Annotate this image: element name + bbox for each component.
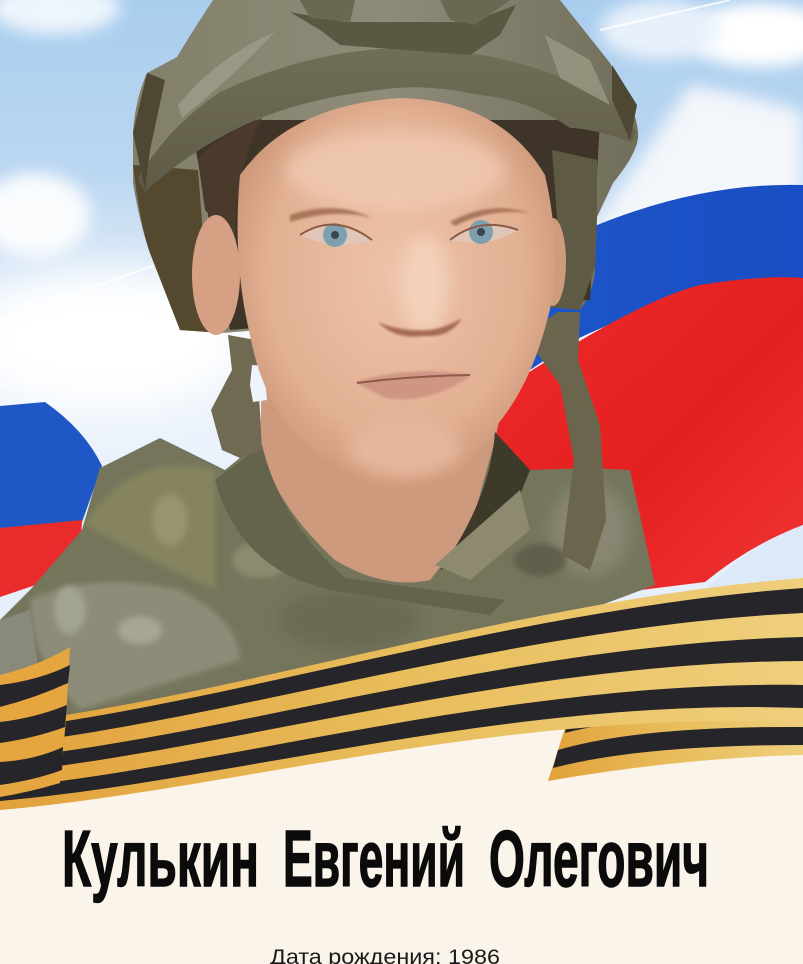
ears [192, 215, 566, 335]
left strap [211, 335, 262, 458]
title: name: Евгений [283, 814, 465, 903]
ribbon main [0, 578, 803, 810]
jacket [0, 432, 655, 730]
collar [215, 432, 530, 615]
title: name: Кулькин [62, 814, 259, 903]
title: name [62, 814, 709, 903]
soldier [0, 0, 655, 730]
neck [260, 350, 515, 582]
mouth [355, 371, 472, 399]
nose [378, 235, 462, 337]
eyebrows [290, 208, 530, 226]
right strap [524, 312, 606, 570]
ribbon fold [0, 647, 70, 797]
eyes [300, 220, 518, 247]
flag: right [480, 85, 803, 600]
face [238, 98, 555, 490]
flag: left [0, 402, 102, 597]
cream panel [0, 700, 803, 964]
helmet [133, 0, 638, 333]
hair [198, 118, 262, 240]
ribbon tail [548, 716, 803, 781]
